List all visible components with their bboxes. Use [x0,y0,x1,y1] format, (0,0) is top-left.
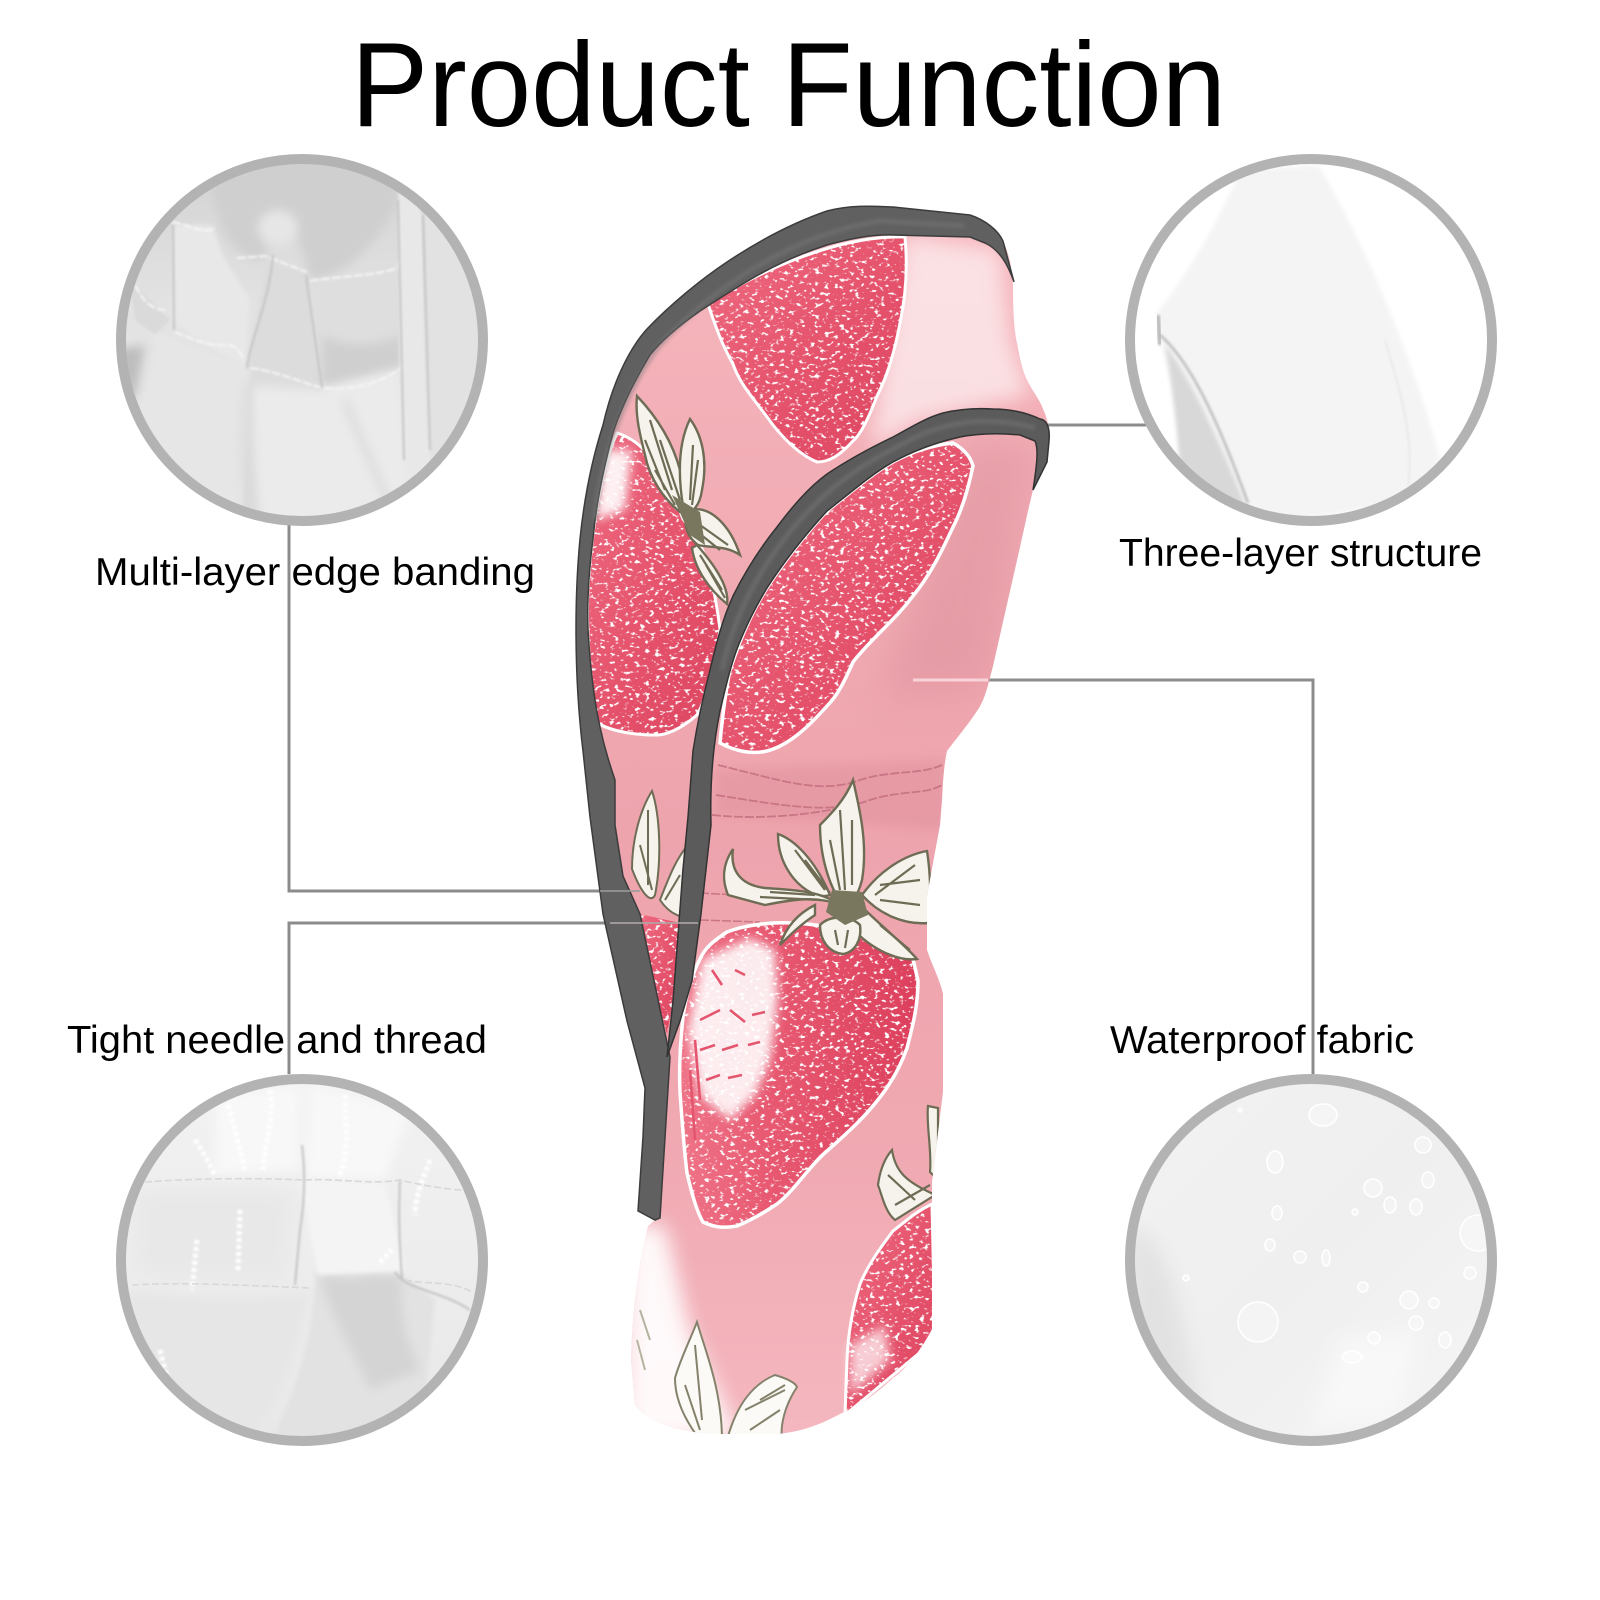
strawberry: top back [708,237,906,462]
callout line overlay: edge banding pointer on product [600,890,640,892]
strawberry: small back [640,914,680,1034]
label: waterproof fabric: Waterproof fabric [1110,1019,1414,1062]
strawberry: large front [680,923,918,1227]
shading: front panel [896,441,1033,690]
strawberry: lower right [845,1204,935,1415]
highlight: band sheen [595,221,1035,670]
detail circle: tight needle and thread [116,1074,488,1450]
panel: pink leather body [600,236,1048,1434]
highlight: crown sheen [870,235,1030,450]
callout line overlay: waterproof pointer on product [913,678,988,682]
leaves: back-left calyx [637,396,740,604]
fade: lower-left white sheen [625,1225,740,1440]
detail circle: multi-layer edge banding [116,154,488,526]
connector: tight needle and thread [289,923,610,1074]
detail circle: three-layer structure [1125,154,1497,530]
leaves: lower-right calyx [878,1106,938,1220]
strawberry: front upper [720,443,973,752]
detail circle: waterproof fabric [1125,1074,1497,1446]
connector: three-layer structure [1047,424,1146,426]
band: back gray edge binding [576,206,1014,1220]
product: strawberry headcover [560,190,1060,1450]
title: Product Function [351,18,1226,152]
callout line overlay: needle pointer on product [610,922,698,924]
leaves: small back calyx [632,791,690,917]
strawberry: back left [587,433,720,735]
highlight: lower-right berry [850,1325,890,1395]
shading: gathered neck folds [700,760,945,922]
leaves: bottom calyx [637,1310,797,1440]
connector: multi-layer edge banding [289,525,600,891]
label: tight needle and thread: Tight needle and thread [67,1019,487,1062]
band: front gray edge binding [667,409,1049,1057]
label: multi-layer edge banding: Multi-layer edge banding [95,551,535,594]
highlight: large berry [688,938,778,1120]
seeds: large berry [690,970,765,1140]
leaves: large calyx [724,780,930,959]
highlight: back-left berry [595,450,632,520]
label: three-layer structure: Three-layer structure [1119,532,1482,575]
connector: waterproof fabric [988,680,1313,1074]
